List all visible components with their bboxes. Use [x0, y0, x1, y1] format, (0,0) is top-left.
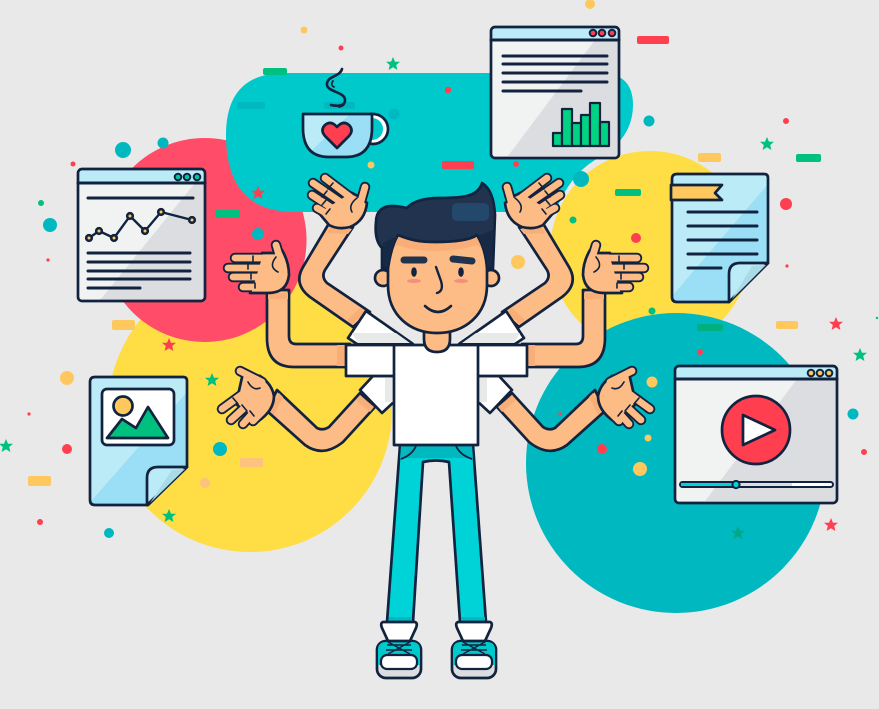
blush — [407, 279, 468, 283]
line chart — [86, 209, 195, 241]
panel: line chart window — [78, 169, 205, 301]
figure: shoulder sleeves — [346, 311, 527, 413]
blob: teal large circle — [526, 313, 826, 613]
blob: yellow right circle — [550, 151, 750, 351]
hand — [222, 371, 274, 424]
hand — [228, 245, 289, 293]
eyes — [411, 267, 464, 277]
panel: bar chart window — [491, 27, 619, 158]
nose — [436, 267, 442, 293]
progress bar — [680, 481, 833, 488]
bar chart — [553, 103, 609, 146]
icon: play button — [722, 396, 790, 464]
blob: red circle — [103, 138, 307, 342]
lower arm — [222, 371, 375, 451]
smile — [425, 306, 451, 312]
panel: video player window — [675, 366, 837, 503]
figure: legs — [387, 445, 486, 622]
panel: note document — [671, 174, 768, 302]
ribbon — [671, 185, 722, 200]
figure: right shoe — [452, 622, 496, 678]
blob: teal rounded panel — [226, 73, 633, 212]
ears — [375, 270, 499, 286]
figure: left arms — [222, 178, 375, 451]
figure: head — [375, 183, 499, 333]
panel: image document — [90, 377, 187, 505]
middle arm — [228, 245, 350, 367]
figure: right arms mirrored — [497, 178, 650, 451]
confetti bars — [28, 36, 821, 486]
confetti dots — [27, 0, 878, 538]
hair — [376, 183, 495, 268]
icon: coffee cup with heart — [303, 69, 388, 157]
face — [388, 232, 487, 333]
figure: torso t-shirt — [394, 345, 478, 445]
blob: yellow left circle — [108, 268, 392, 552]
hand — [312, 178, 367, 228]
figure: left shoe — [377, 622, 421, 678]
raised arm — [299, 178, 370, 327]
eyebrows — [404, 259, 472, 261]
confetti stars — [0, 57, 867, 539]
figure: neck — [424, 328, 450, 352]
